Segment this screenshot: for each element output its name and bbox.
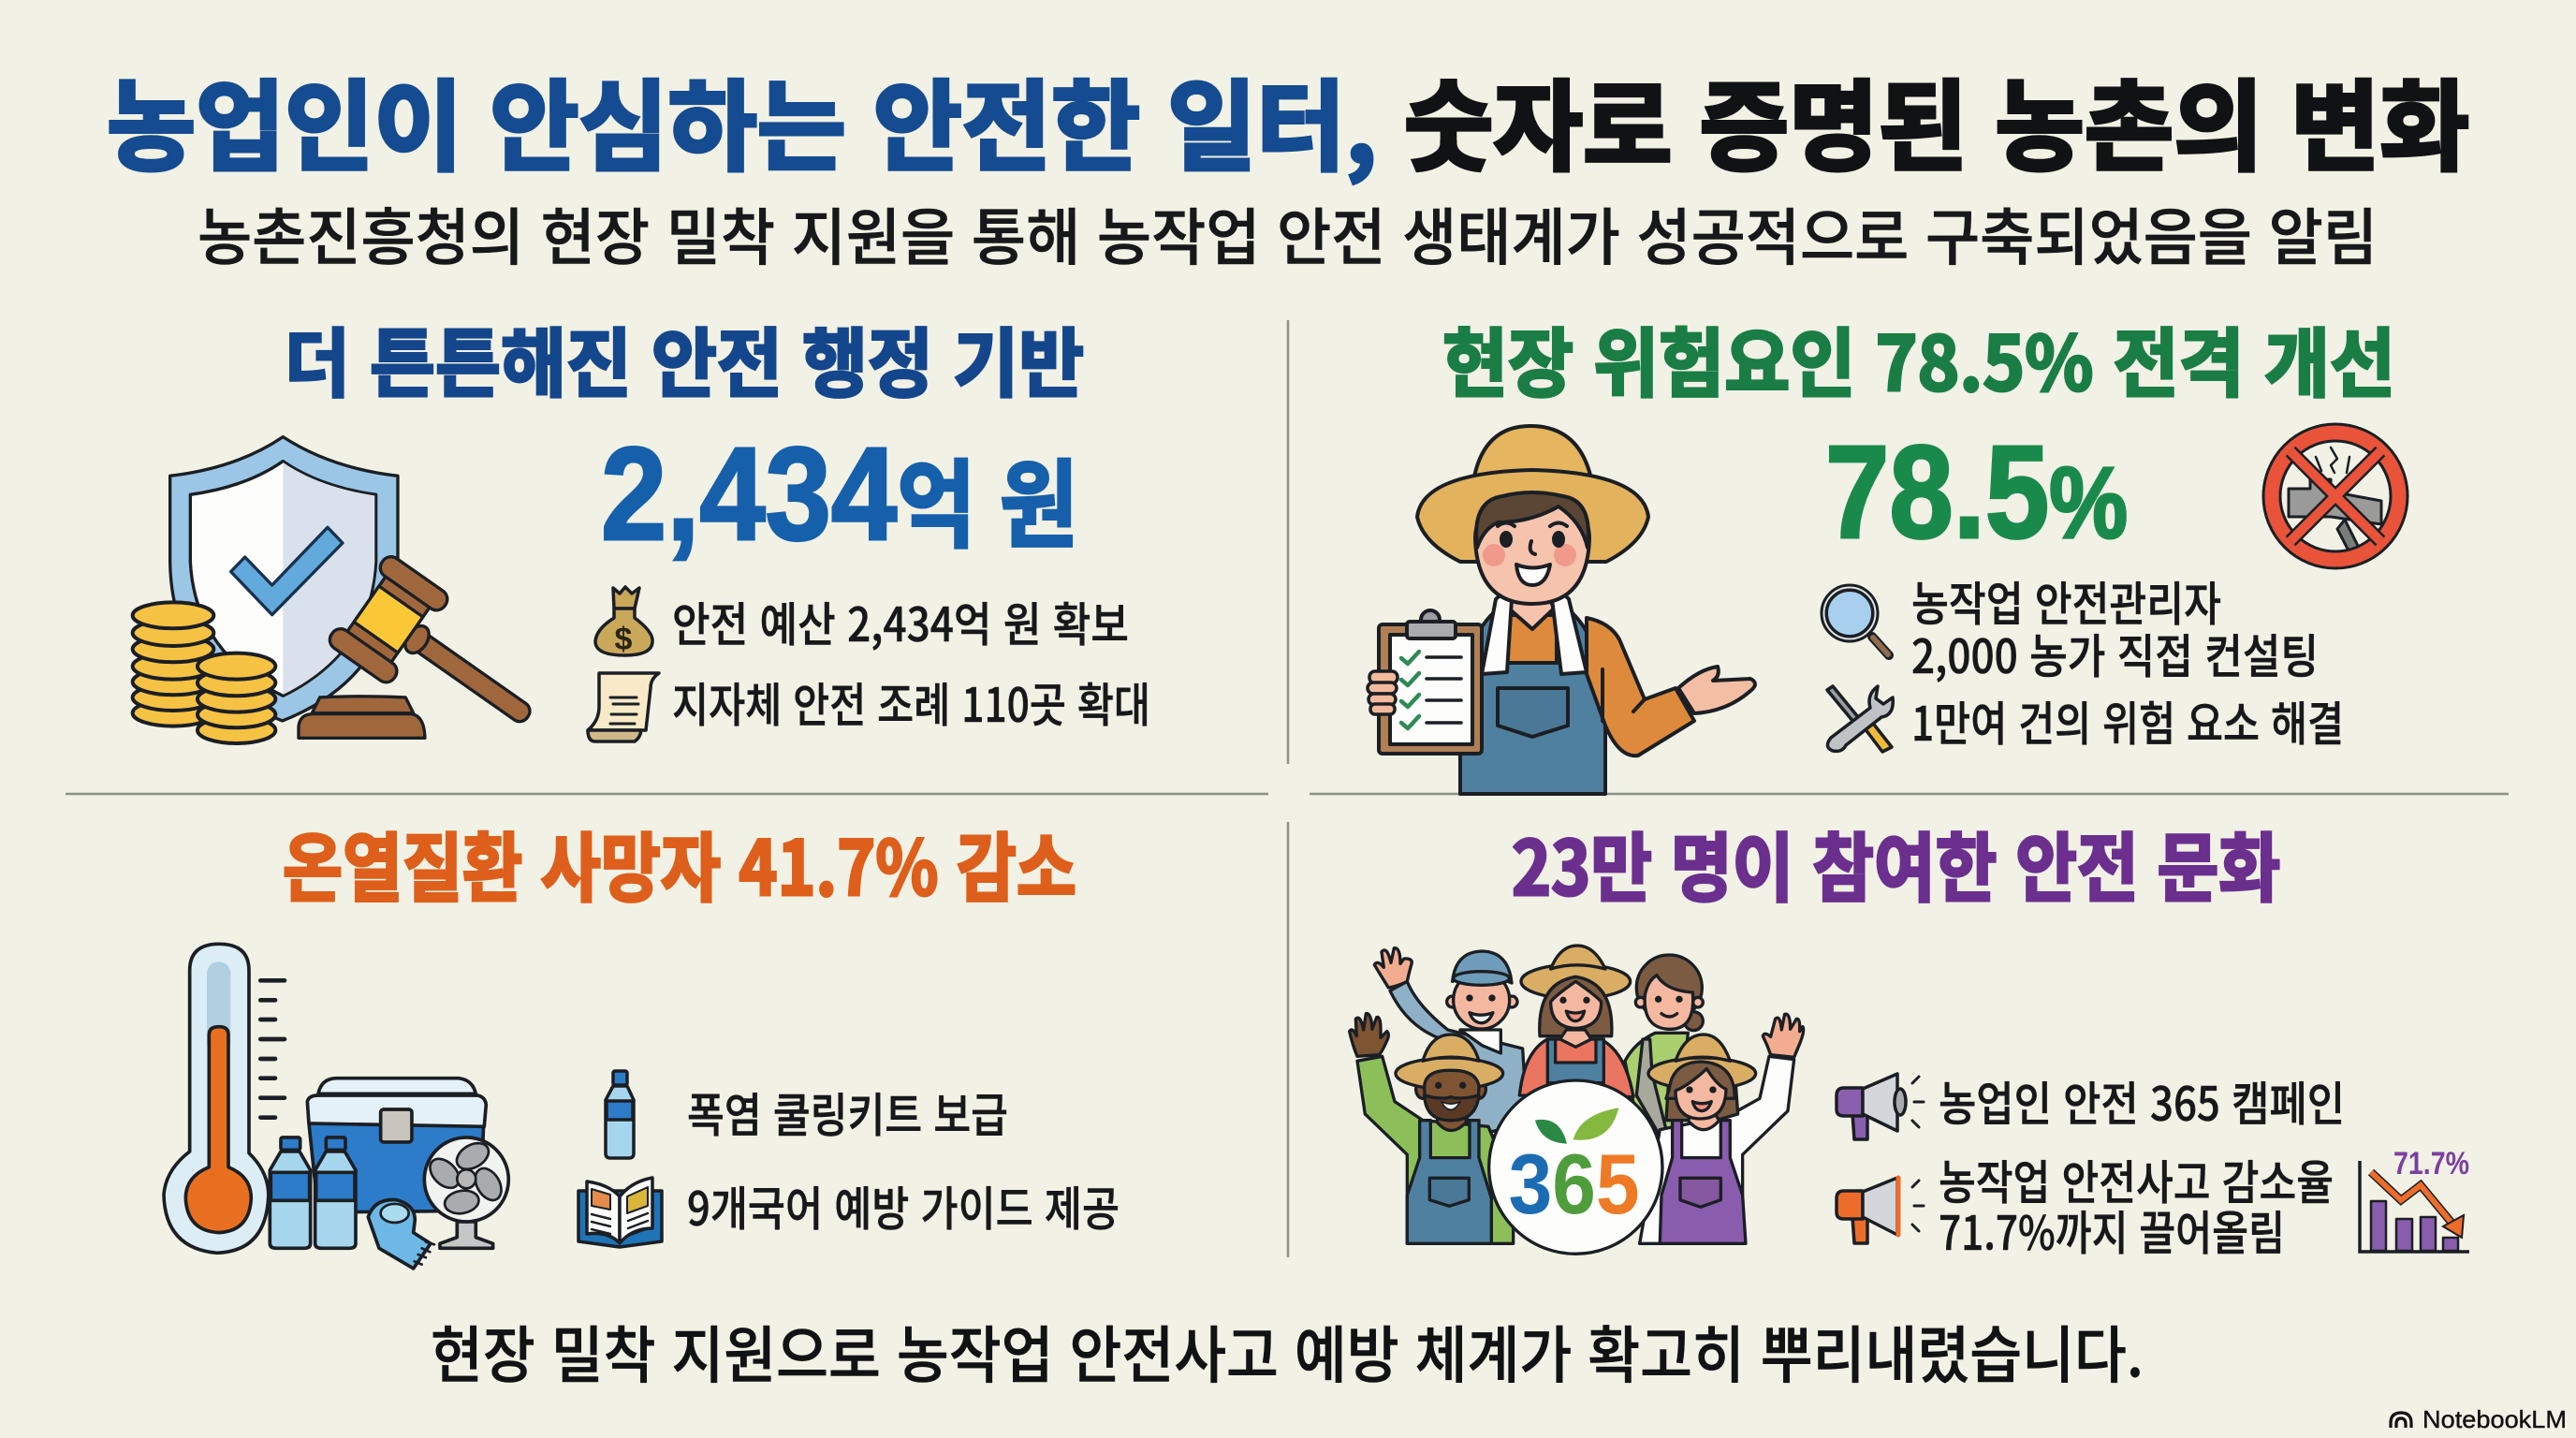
illustration: farmers with 365 badge <box>1350 946 1804 1254</box>
title: 숫자로 증명된 농촌의 변화 <box>1404 49 2469 191</box>
icon: orange megaphone <box>1837 1178 1924 1243</box>
panel: heat illness <box>164 809 1120 1269</box>
icon: magnifier <box>1822 585 1889 655</box>
bullet: budget: 안전 예산 2,434억 원 확보 <box>672 588 1129 655</box>
icon: no hazard sign <box>2272 433 2399 560</box>
icon: screwdriver and wrench <box>1827 686 1893 752</box>
subtitle: 농촌진흥청의 현장 밀착 지원을 통해 농작업 안전 생태계가 성공적으로 구축되었음을 알림 <box>198 188 2378 278</box>
icon: shield, coins and gavel <box>133 437 559 762</box>
panel: hazard improvement <box>1368 304 2399 794</box>
icon: scroll <box>588 673 659 741</box>
heading: hazard improvement: 현장 위험요인 78.5% 전격 개선 <box>1442 304 2395 413</box>
NotebookLM mark: NotebookLM <box>2422 1405 2567 1433</box>
heading: heat illness: 온열질환 사망자 41.7% 감소 <box>283 809 1076 917</box>
panel: safety culture <box>1350 809 2469 1264</box>
big number: 78.5%: 78.5% <box>1825 418 2128 565</box>
person: green shirt <box>1625 955 1703 1136</box>
chart: declining accident bars <box>2360 1146 2469 1252</box>
panel: safety administration <box>133 304 1150 762</box>
bullet: safety manager line 1: 농작업 안전관리자 <box>1911 567 2221 635</box>
big number: 2,434억 원: 2,434억 원 <box>601 419 1078 567</box>
icon: money bag <box>595 587 652 657</box>
heading: safety administration: 더 튼튼해진 안전 행정 기반 <box>285 304 1084 413</box>
person: cap <box>1374 948 1528 1136</box>
person: straw hat center <box>1519 946 1633 1097</box>
badge: 365 <box>1489 1080 1662 1254</box>
chart: declining accident bars: 71.7% <box>2393 1146 2469 1181</box>
icon: money bag: $ <box>615 622 633 657</box>
bullet: guide: 9개국어 예방 가이드 제공 <box>687 1172 1120 1240</box>
illustration: thermometer, cooler, bottles, fan <box>164 944 508 1269</box>
bullet: reduction rate line 2: 71.7%까지 끌어올림 <box>1939 1196 2285 1264</box>
title: 농업인이 안심하는 안전한 일터, <box>107 49 1377 191</box>
bullet: hazards resolved: 1만여 건의 위험 요소 해결 <box>1911 687 2344 755</box>
badge: 365: 365 <box>1509 1137 1640 1232</box>
title <box>107 49 2469 191</box>
icon: water bottle <box>606 1071 634 1158</box>
bullet: ordinance: 지자체 안전 조례 110곳 확대 <box>672 668 1150 736</box>
person: bearded farmer <box>1350 1014 1514 1243</box>
heading: safety culture: 23만 명이 참여한 안전 문화 <box>1512 809 2280 917</box>
person: purple overalls <box>1640 1014 1804 1243</box>
icon: purple megaphone <box>1837 1074 1924 1139</box>
bullet: cooling kit: 폭염 쿨링키트 보급 <box>687 1078 1008 1146</box>
footer message: 현장 밀착 지원으로 농작업 안전사고 예방 체계가 확고히 뿌리내렸습니다. <box>431 1306 2144 1396</box>
bullet: reduction rate line 1: 농작업 안전사고 감소율 <box>1939 1146 2334 1213</box>
bullet: safety manager line 2: 2,000 농가 직접 컨설팅 <box>1911 620 2319 687</box>
bullet: 365 campaign: 농업인 안전 365 캠페인 <box>1939 1067 2345 1135</box>
icon: open book <box>578 1178 662 1247</box>
illustration: farmer with clipboard <box>1368 426 1755 794</box>
